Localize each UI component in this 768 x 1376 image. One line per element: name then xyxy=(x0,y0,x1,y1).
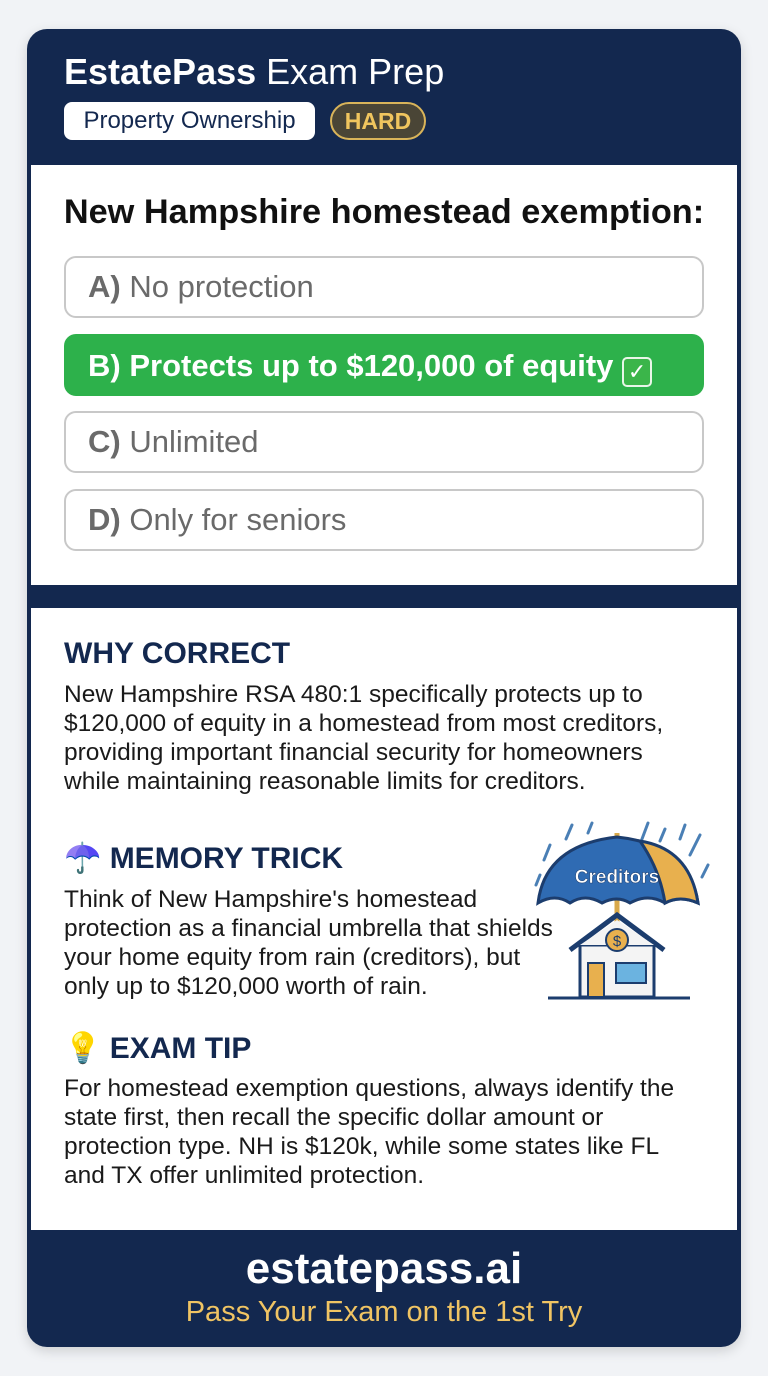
tag: difficulty xyxy=(330,102,426,140)
option B correct xyxy=(64,334,704,396)
text: exam tip: For homestead exemption questions, always identify the state first, then recall the specific dollar amount or protection type. NH is $120k, while some states like FL and TX offer unlimited protection. xyxy=(64,1075,674,1189)
icon: umbrella over house: $ xyxy=(613,933,622,950)
text: memory trick: Think of New Hampshire's homestead protection as a financial umbrella that shields your home equity from rain (creditors), but only up to $120,000 worth of rain. xyxy=(64,886,553,1000)
heading: exam tip: 💡 EXAM TIP xyxy=(64,1032,251,1065)
footer brand: estatepass.ai xyxy=(246,1244,522,1293)
tag: category xyxy=(64,102,315,140)
icon: umbrella over house xyxy=(534,822,710,1000)
panel: question xyxy=(31,165,737,585)
option D xyxy=(64,489,704,551)
option D: D) Only for seniors xyxy=(88,502,346,537)
option B correct: B) Protects up to $120,000 of equity xyxy=(88,348,613,383)
tag: difficulty: HARD xyxy=(345,108,411,134)
panel: explanation xyxy=(31,608,737,1230)
icon: umbrella over house: Creditors xyxy=(575,867,659,888)
question text: New Hampshire homestead exemption: xyxy=(64,193,704,231)
title: EstatePass Exam Prep xyxy=(64,51,444,92)
option B correct: ✓ xyxy=(628,359,646,384)
heading: why correct: WHY CORRECT xyxy=(64,637,290,670)
option C: C) Unlimited xyxy=(88,424,259,459)
text: why correct: New Hampshire RSA 480:1 specifically protects up to $120,000 of equity in a homestead from most creditors, providing important financial security for homeowners while maintaining reasonable limits for creditors. xyxy=(64,681,663,795)
option A: A) No protection xyxy=(88,269,314,304)
footer tagline: Pass Your Exam on the 1st Try xyxy=(186,1296,582,1328)
heading: memory trick: ☂️ MEMORY TRICK xyxy=(64,842,343,875)
option A xyxy=(64,256,704,318)
option C xyxy=(64,411,704,473)
tag: category: Property Ownership xyxy=(83,107,296,134)
